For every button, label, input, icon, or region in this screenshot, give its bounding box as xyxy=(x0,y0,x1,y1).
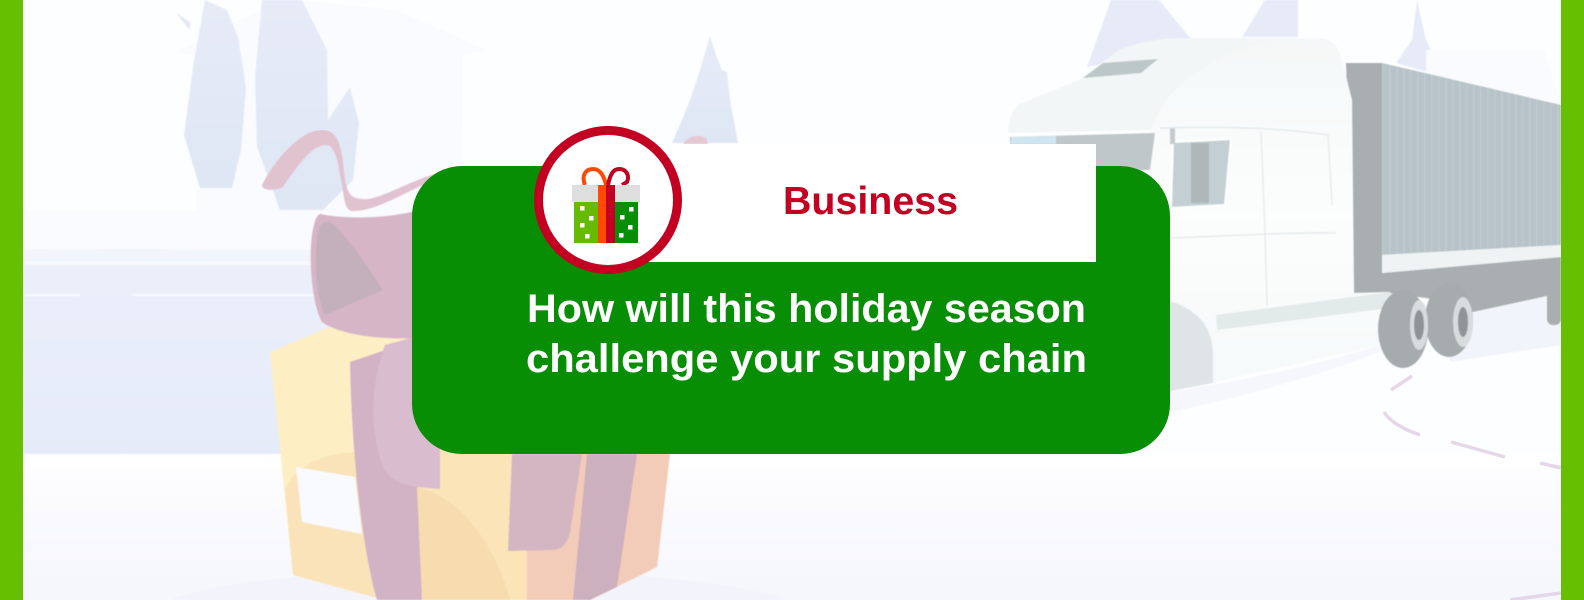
snow band xyxy=(23,210,423,250)
gift left face xyxy=(270,320,440,600)
heading: How will this holiday season xyxy=(527,287,1086,331)
background house left xyxy=(173,0,487,210)
badge ring xyxy=(538,130,678,270)
gift body right xyxy=(615,202,638,243)
ribbon hanging right xyxy=(508,454,582,551)
gift ribbon red xyxy=(606,185,615,243)
gift front face xyxy=(350,330,680,600)
side window and mirror xyxy=(1170,128,1231,208)
truck wheels xyxy=(1378,283,1473,368)
gift lid xyxy=(572,185,640,202)
bow body xyxy=(311,210,420,338)
bow ribbon tail xyxy=(262,130,440,211)
roof fairing xyxy=(1008,38,1280,133)
trees right xyxy=(1087,0,1445,77)
side step bar xyxy=(1216,292,1390,330)
bow right fragment xyxy=(683,136,708,144)
gift label xyxy=(296,467,362,534)
door lines xyxy=(1160,127,1336,305)
truck xyxy=(1008,38,1561,412)
background house right xyxy=(1426,50,1561,180)
trees left xyxy=(175,0,359,210)
ribbon vertical left xyxy=(350,345,422,600)
icon: gift badge xyxy=(538,130,678,270)
road dashes xyxy=(1384,376,1561,600)
gift ribbon orange xyxy=(598,185,606,243)
side border left xyxy=(0,0,23,600)
cab xyxy=(1008,38,1390,392)
ribbon vertical right xyxy=(573,454,637,600)
gift dots xyxy=(580,206,634,238)
frozen lake xyxy=(23,249,423,454)
sunroof xyxy=(1083,59,1158,78)
gift bow loops xyxy=(584,169,628,185)
side border right xyxy=(1561,0,1584,600)
gift body left xyxy=(574,202,598,243)
gift shadow xyxy=(170,570,790,600)
category text: Business xyxy=(783,180,958,223)
windshield xyxy=(1010,133,1155,170)
bow inner shadow xyxy=(316,222,383,315)
ribbon hanging left xyxy=(373,330,440,489)
heading xyxy=(526,287,1087,381)
gift peach side xyxy=(527,454,670,600)
gift box illustration xyxy=(170,130,790,600)
road snow highlight xyxy=(1171,345,1380,412)
gift shaded fold xyxy=(417,487,510,600)
ground snow xyxy=(23,454,1561,600)
road snow shade xyxy=(1440,293,1561,362)
trailer xyxy=(1346,63,1561,325)
white category label xyxy=(607,144,1096,262)
wheel arch xyxy=(1165,300,1213,392)
heading: challenge your supply chain xyxy=(526,337,1087,381)
green title panel xyxy=(412,166,1170,454)
pine tree centre xyxy=(672,36,738,143)
